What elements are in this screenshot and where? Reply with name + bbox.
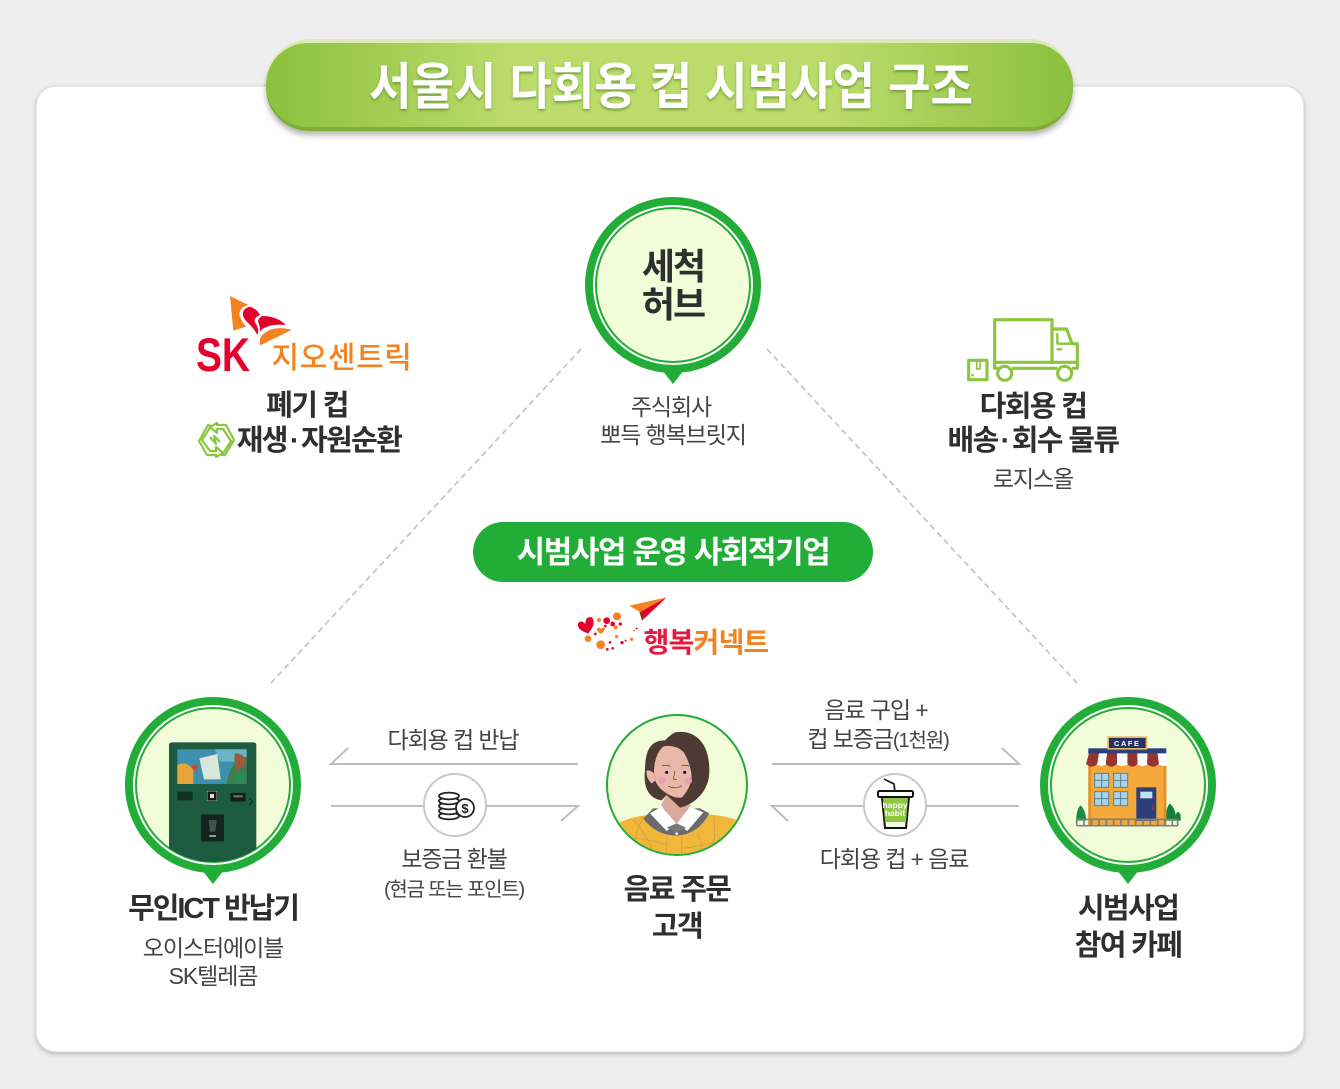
text: kiosk: 무인ICT 반납기: [128, 892, 298, 925]
label: deposit refund: 보증금 환불: [401, 846, 507, 872]
node: customer: [607, 715, 747, 855]
cup logo text: happy: [882, 800, 908, 810]
text: kiosk operator: 오이스터에이블: [143, 935, 283, 961]
text: customer line 2: 고객: [652, 910, 702, 943]
cafe illustration: [1076, 736, 1181, 826]
icon: coins: [424, 774, 486, 836]
label: purchase: 음료 구입 +: [824, 697, 928, 723]
arrow: purchase: [772, 748, 1019, 764]
wordmark: 행복커넥트: [644, 627, 768, 658]
cup logo text line 2: habit: [885, 808, 905, 818]
hub operator text: 주식회사: [631, 394, 712, 420]
node: partner cafe: [1044, 701, 1212, 884]
geocentric wordmark: 지오센트릭: [272, 342, 412, 375]
text: waste cup: 폐기 컵: [266, 389, 348, 422]
arrow: cup return: [331, 748, 578, 764]
arrow: cup and drink: [772, 806, 1019, 821]
hub label: 세척: [642, 246, 704, 287]
node: return kiosk: [129, 701, 297, 884]
text: kiosk partner: SK텔레콤: [169, 963, 257, 989]
arrow: deposit refund: [331, 806, 578, 821]
butterfly mark: [230, 296, 292, 345]
icon: cup: [864, 774, 926, 836]
text: recycling: 재생·자원순환: [237, 424, 402, 457]
kiosk image: [169, 742, 256, 876]
cafe illustration: CAFE: [1114, 739, 1141, 748]
SK letters: SK: [196, 328, 250, 381]
hub label line 2: 허브: [642, 284, 705, 325]
label: cup deposit: 컵 보증금(1천원): [807, 726, 949, 752]
operator pill: [473, 522, 873, 582]
logo: happy connect: [578, 597, 768, 658]
dashed connector: hub to cafe: [767, 349, 1077, 683]
dashed connector: hub to kiosk: [271, 349, 581, 683]
title text: 서울시 다회용 컵 시범사업 구조: [369, 59, 973, 115]
icon: recycle: [199, 423, 234, 457]
text: delivery line 2: 배송·회수 물류: [947, 424, 1119, 457]
text: customer: 음료 주문: [624, 874, 731, 906]
label: cash or points: (현금 또는 포인트): [384, 878, 525, 901]
label: cup and drink: 다회용 컵 + 음료: [820, 846, 968, 872]
paper plane and hearts: [578, 597, 667, 651]
operator text: 시범사업 운영 사회적기업: [517, 535, 829, 570]
icon: coins: $: [461, 801, 469, 816]
logo: SK geocentric: [196, 296, 412, 381]
node: washing hub: [589, 201, 757, 384]
text: delivery: 다회용 컵: [980, 390, 1086, 423]
customer illustration: [620, 732, 737, 855]
hub operator name: 뽀득 행복브릿지: [600, 422, 746, 448]
title banner: [266, 39, 1073, 131]
label: cup return: 다회용 컵 반납: [388, 727, 519, 753]
icon: truck: [969, 320, 1077, 380]
text: cafe line 2: 참여 카페: [1075, 929, 1181, 962]
text: cafe: 시범사업: [1078, 892, 1178, 925]
text: logistics company: 로지스올: [993, 466, 1073, 492]
